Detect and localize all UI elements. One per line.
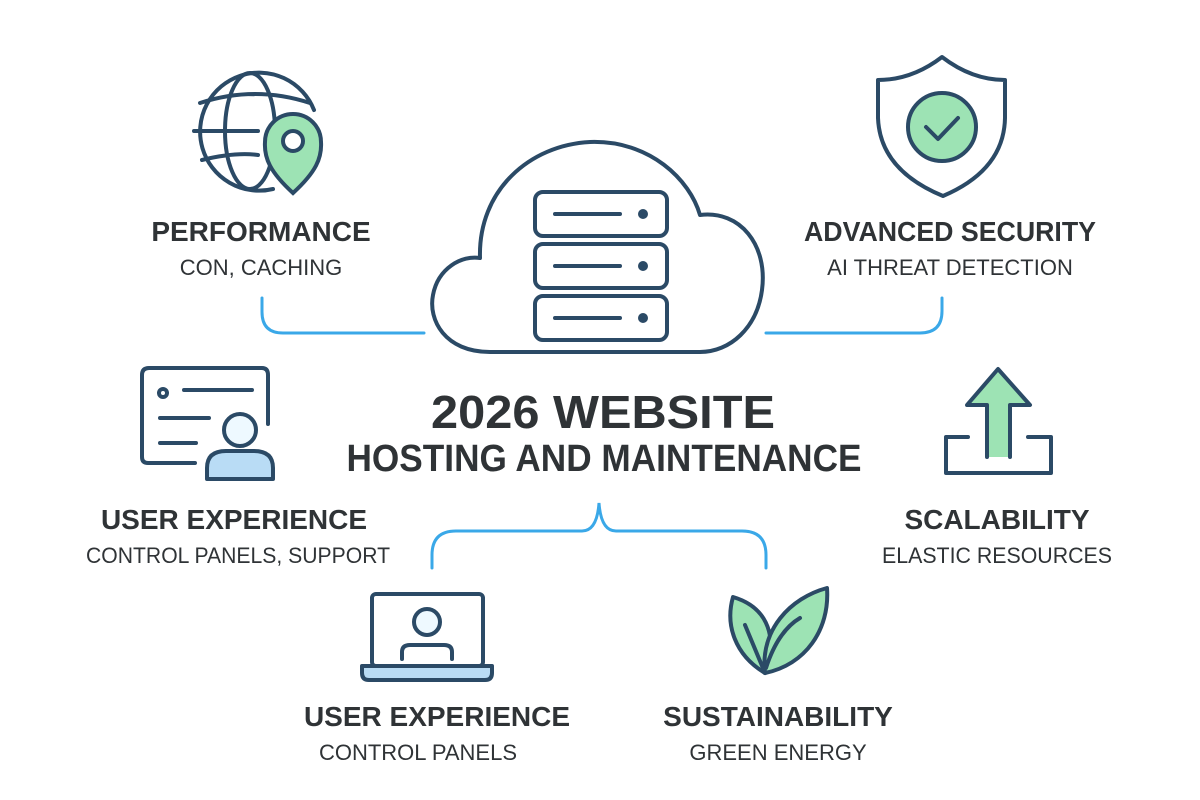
heading: user experience left: USER EXPERIENCE [101,504,367,535]
subtext: user experience bottom: CONTROL PANELS [319,740,517,765]
subtitle: HOSTING AND MAINTENANCE [346,438,862,480]
icon: shield with check [878,57,1005,196]
connector: right [766,298,942,333]
icon: leaf [730,588,827,673]
heading: sustainability: SUSTAINABILITY [663,701,893,732]
heading: user experience bottom: USER EXPERIENCE [304,701,570,732]
connector: brace [432,503,766,568]
heading: advanced security [804,216,1096,280]
heading: performance [151,216,371,280]
title: 2026 WEBSITE [431,386,775,438]
subtext: user experience left: CONTROL PANELS, SUPPORT [86,543,390,568]
connector: left [262,298,424,333]
subtext: scalability: ELASTIC RESOURCES [882,543,1112,568]
heading: scalability: SCALABILITY [904,504,1090,535]
heading: performance: PERFORMANCE [151,216,371,247]
subtext: performance: CON, CACHING [180,255,342,280]
icon: browser with user [142,368,273,479]
heading: sustainability [663,701,893,765]
icon: laptop with user [362,594,492,680]
icon: cloud with server [432,142,763,352]
heading: advanced security: ADVANCED SECURITY [804,216,1096,247]
heading: user experience left [86,504,390,568]
subtext: security: AI THREAT DETECTION [827,255,1073,280]
heading: user experience bottom [304,701,570,765]
title [346,386,862,480]
heading: scalability [882,504,1112,568]
subtext: sustainability: GREEN ENERGY [689,740,867,765]
icon: globe with location pin [194,73,321,193]
icon: upload arrow [946,369,1051,473]
